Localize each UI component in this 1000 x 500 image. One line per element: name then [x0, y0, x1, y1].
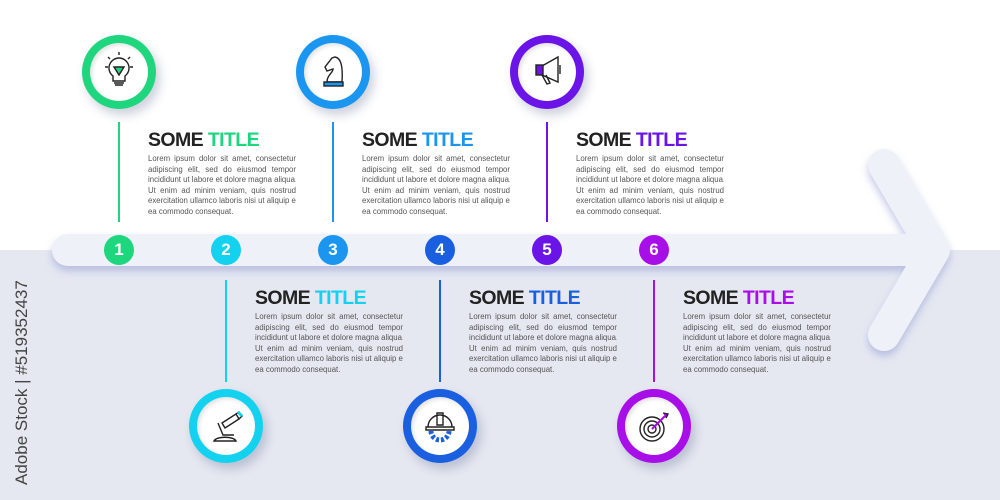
- text block 5: Lorem ipsum dolor sit amet, consectetur: [576, 154, 724, 163]
- number badges: 1: [114, 240, 124, 259]
- text block 4: [469, 287, 617, 374]
- text block 3: [362, 129, 510, 216]
- text block 3: adipiscing elit, sed do eiusmod tempor: [362, 165, 510, 174]
- text block 2: [255, 287, 403, 374]
- text: 6: [649, 240, 659, 259]
- text block 3: ea commodo consequat.: [362, 207, 447, 216]
- connector lines: [118, 122, 120, 222]
- text block 6: exercitation ullamco laboris nisi ut aliquip ex: [683, 354, 831, 363]
- text block 6: adipiscing elit, sed do eiusmod tempor: [683, 323, 831, 332]
- text block 5: incididunt ut labore et dolore magna aliqua.: [576, 175, 724, 184]
- text: 4: [435, 240, 445, 259]
- text block 5: exercitation ullamco laboris nisi ut aliquip ex: [576, 196, 724, 205]
- text block 4: Ut enim ad minim veniam, quis nostrud: [469, 344, 617, 353]
- text block 2: adipiscing elit, sed do eiusmod tempor: [255, 323, 403, 332]
- text block 5: SOME TITLE: [576, 129, 687, 151]
- text block 4: adipiscing elit, sed do eiusmod tempor: [469, 323, 617, 332]
- text block 4: exercitation ullamco laboris nisi ut aliquip ex: [469, 354, 617, 363]
- text block 1: SOME TITLE: [148, 129, 259, 151]
- text block 4: SOME TITLE: [469, 287, 580, 309]
- text block 5: adipiscing elit, sed do eiusmod tempor: [576, 165, 724, 174]
- text block 3: Lorem ipsum dolor sit amet, consectetur: [362, 154, 510, 163]
- text block 5: ea commodo consequat.: [576, 207, 661, 216]
- text block 1: exercitation ullamco laboris nisi ut aliquip ex: [148, 196, 296, 205]
- text block 2: exercitation ullamco laboris nisi ut aliquip ex: [255, 354, 403, 363]
- text block 3: Ut enim ad minim veniam, quis nostrud: [362, 186, 510, 195]
- vertical watermark text: Adobe Stock | #519352437: [12, 280, 31, 485]
- text block 1: incididunt ut labore et dolore magna aliqua.: [148, 175, 296, 184]
- number badges: [104, 235, 134, 265]
- icon: target: [617, 389, 691, 463]
- text block 3: incididunt ut labore et dolore magna aliqua.: [362, 175, 510, 184]
- text block 1: [148, 129, 296, 216]
- text block 3: exercitation ullamco laboris nisi ut aliquip ex: [362, 196, 510, 205]
- text block 3: SOME TITLE: [362, 129, 473, 151]
- text block 5: [576, 129, 724, 216]
- icon: microscope: [189, 389, 263, 463]
- icon: megaphone: [510, 35, 584, 109]
- text block 2: Lorem ipsum dolor sit amet, consectetur: [255, 312, 403, 321]
- text block 2: SOME TITLE: [255, 287, 366, 309]
- text block 1: Ut enim ad minim veniam, quis nostrud: [148, 186, 296, 195]
- text block 1: ea commodo consequat.: [148, 207, 233, 216]
- text block 6: [683, 287, 831, 374]
- text block 2: Ut enim ad minim veniam, quis nostrud: [255, 344, 403, 353]
- text: 3: [328, 240, 338, 259]
- text block 6: Lorem ipsum dolor sit amet, consectetur: [683, 312, 831, 321]
- text: 2: [221, 240, 231, 259]
- text block 6: Ut enim ad minim veniam, quis nostrud: [683, 344, 831, 353]
- text block 6: SOME TITLE: [683, 287, 794, 309]
- icon: lightbulb: [82, 35, 156, 109]
- icon: helmet gear: [403, 389, 477, 463]
- icon: chess knight: [296, 35, 370, 109]
- text block 2: incididunt ut labore et dolore magna aliqua.: [255, 333, 403, 342]
- text: 5: [542, 240, 552, 259]
- text block 2: ea commodo consequat.: [255, 365, 340, 374]
- text block 6: ea commodo consequat.: [683, 365, 768, 374]
- text block 4: ea commodo consequat.: [469, 365, 554, 374]
- text block 5: Ut enim ad minim veniam, quis nostrud: [576, 186, 724, 195]
- text block 4: incididunt ut labore et dolore magna aliqua.: [469, 333, 617, 342]
- text block 6: incididunt ut labore et dolore magna aliqua.: [683, 333, 831, 342]
- bottom background: [0, 250, 1000, 500]
- text block 4: Lorem ipsum dolor sit amet, consectetur: [469, 312, 617, 321]
- text block 1: Lorem ipsum dolor sit amet, consectetur: [148, 154, 296, 163]
- text block 1: adipiscing elit, sed do eiusmod tempor: [148, 165, 296, 174]
